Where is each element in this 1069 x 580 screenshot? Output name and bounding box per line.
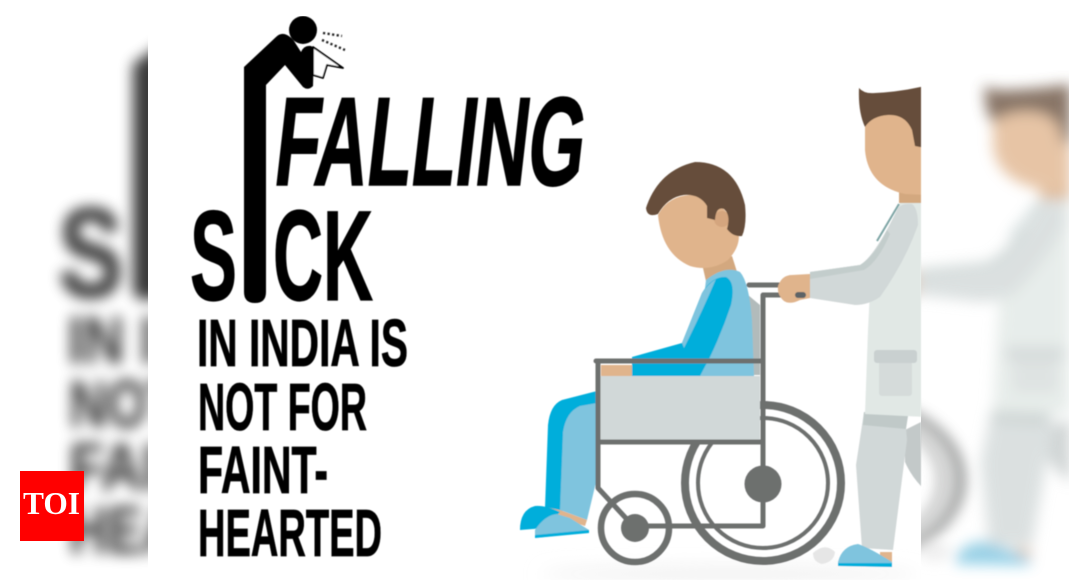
title: sick: S xyxy=(190,185,237,328)
subtitle: in India is not for faint-hearted: NOT FOR xyxy=(198,370,367,445)
title: falling: FALLING xyxy=(269,71,594,212)
wheelchair: backrest xyxy=(748,295,760,375)
icon: sneezing figure forming the letter I xyxy=(244,16,345,303)
blurred background copy of artwork: CK xyxy=(173,181,312,324)
patient: ear xyxy=(714,211,728,227)
title: sick: CK xyxy=(273,185,373,328)
doctor: stethoscope xyxy=(877,204,899,241)
patient: hand xyxy=(601,365,632,376)
doctor: coat xyxy=(865,203,925,417)
patient: hair xyxy=(646,162,746,236)
doctor: hand on handle xyxy=(778,274,810,303)
blurred background copy of artwork: FALLING xyxy=(167,69,618,209)
TOI logo: TOI xyxy=(23,485,80,521)
doctor: shoe xyxy=(838,544,892,567)
patient: legs xyxy=(545,391,597,526)
title: sick xyxy=(190,185,373,328)
wheelchair: big wheel xyxy=(685,405,841,561)
wheelchair: big wheel hub xyxy=(744,466,782,502)
patient: face xyxy=(658,195,739,268)
illustration: ground shadow xyxy=(650,563,892,578)
doctor: rear shoe xyxy=(813,547,835,564)
patient: neck xyxy=(702,256,737,281)
doctor: trousers xyxy=(856,412,925,550)
blurred background copy of artwork: S xyxy=(58,181,123,324)
wheelchair: seat panel xyxy=(599,376,760,441)
blurred background copy of artwork: HEARTED xyxy=(69,493,324,568)
central white panel xyxy=(148,0,921,580)
patient: torso xyxy=(700,269,754,377)
wheelchair: small wheel xyxy=(601,494,669,562)
blurred background copy of artwork: FAINT- xyxy=(69,430,249,505)
subtitle: in India is not for faint-hearted: HEARTED xyxy=(198,496,382,571)
doctor: sleeve xyxy=(810,204,918,305)
illustration: patient and doctor with wheelchair xyxy=(520,86,925,567)
TOI logo xyxy=(20,471,84,541)
doctor: neck and face xyxy=(865,114,925,203)
wheelchair: frame xyxy=(596,285,806,528)
blurred background copy of artwork: IN INDIA IS xyxy=(68,303,360,378)
doctor: hair xyxy=(859,86,925,148)
main artwork xyxy=(190,16,925,580)
doctor: pocket xyxy=(874,350,917,396)
patient: sleeve highlight xyxy=(682,279,716,348)
subtitle: in India is not for faint-hearted: FAINT- xyxy=(198,433,328,508)
subtitle: in India is not for faint-hearted: IN INDIA IS xyxy=(197,306,408,381)
patient: arm xyxy=(632,277,733,376)
blurred background copy of artwork: NOT FOR xyxy=(69,367,303,442)
subtitle: in India is not for faint-hearted xyxy=(197,306,408,571)
patient: shoes xyxy=(520,506,589,538)
